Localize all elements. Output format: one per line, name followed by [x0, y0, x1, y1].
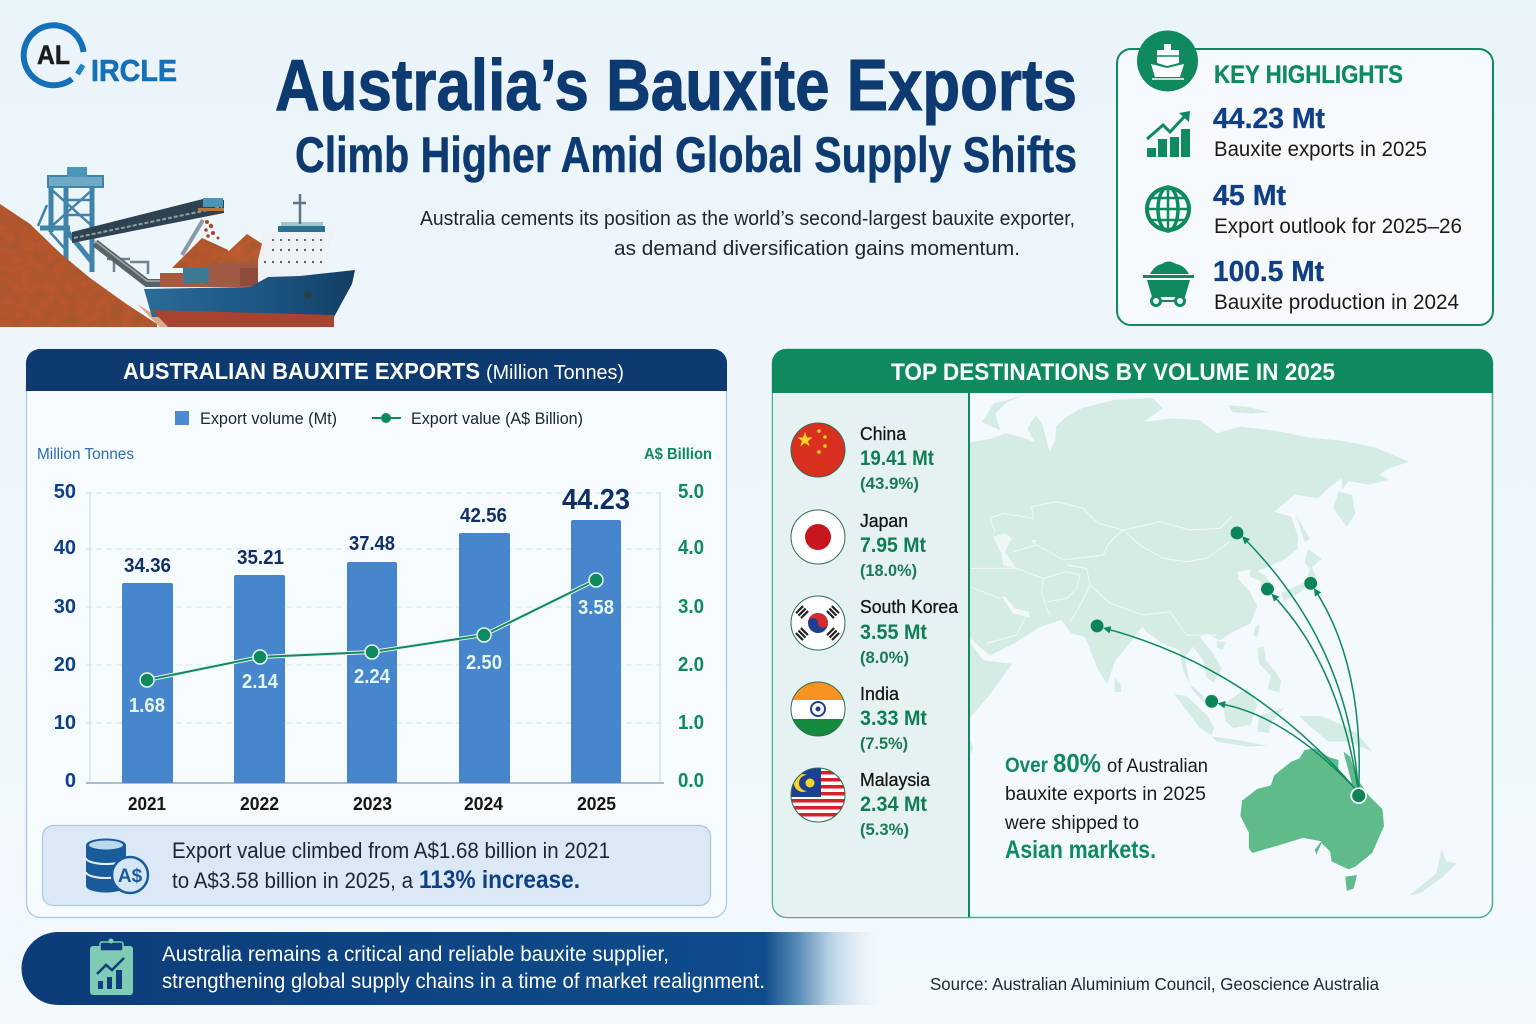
title: Australia’s Bauxite Exports [275, 46, 1077, 126]
destination: South Korea [860, 597, 959, 667]
destination: Japan [860, 511, 926, 580]
destination: South Korea: (8.0%) [860, 648, 909, 667]
destination: India [860, 684, 927, 753]
flag: China [791, 423, 845, 477]
left axis labels: 40 [54, 537, 76, 559]
legend [175, 409, 583, 428]
stat: outlook: 45 Mt [1213, 180, 1286, 212]
export value line: 3.58 [578, 597, 614, 619]
illustration: bauxite pile, conveyor and cargo ship [0, 167, 355, 327]
callout text: Export value climbed from A$1.68 billion in 2021 [172, 838, 610, 863]
world map [968, 395, 1457, 895]
lower conveyor [95, 243, 165, 283]
left axis labels: 30 [54, 596, 76, 618]
stat: exports 2025: 44.23 Mt [1213, 103, 1325, 135]
title [275, 46, 1077, 183]
stat: exports 2025: Bauxite exports in 2025 [1214, 138, 1427, 161]
export value line: 2.24 [354, 666, 391, 688]
subtitle text: Australia cements its position as the world’s second-largest bauxite exporter, [420, 208, 1075, 230]
right axis labels: 1.0 [678, 712, 704, 734]
panel: Australian bauxite exports chart [22, 349, 1493, 1005]
heading: KEY HIGHLIGHTS [1214, 61, 1403, 89]
subtitle text [420, 208, 1075, 260]
map: Australia [1240, 748, 1384, 891]
support strut [182, 220, 203, 255]
destination: Malaysia: Malaysia [860, 770, 931, 790]
Sulawesi [1257, 708, 1284, 733]
panel: key highlights [1117, 30, 1493, 325]
map markers [1091, 527, 1366, 803]
map callout text: were shipped to [1004, 812, 1139, 834]
flag: Malaysia [790, 768, 846, 822]
containers [160, 273, 210, 287]
destination: China: 19.41 Mt [860, 447, 934, 470]
logo: AL Circle [24, 25, 177, 88]
right axis labels: 3.0 [678, 596, 704, 618]
bottom banner [22, 932, 885, 1005]
left axis labels [54, 481, 76, 792]
export value line: 2.14 [242, 671, 279, 693]
icon: rising chart [1147, 111, 1190, 157]
destination: China [860, 424, 934, 493]
legend: Export volume (Mt) [200, 409, 337, 428]
year labels: 2023 [353, 793, 392, 814]
destination: Malaysia: 2.34 Mt [860, 793, 927, 816]
bars [122, 520, 621, 783]
map callout text: 80% [1053, 748, 1101, 778]
axis titles: Million Tonnes [37, 446, 134, 463]
panel header [772, 349, 1493, 393]
year labels [128, 793, 616, 814]
icon: coins with A$ [86, 838, 148, 893]
bar value labels: 37.48 [349, 533, 395, 555]
legend: Export value (A$ Billion) [411, 409, 583, 428]
destination: Malaysia: (5.3%) [860, 820, 909, 839]
callout text [172, 838, 610, 894]
icon: coins with A$: A$ [118, 866, 143, 887]
stat: production [1213, 256, 1459, 314]
icon: globe [1146, 187, 1190, 231]
title: Climb Higher Amid Global Supply Shifts [295, 127, 1077, 183]
left axis labels: 20 [54, 654, 76, 676]
Philippines [1257, 647, 1281, 693]
New Guinea [1300, 716, 1372, 752]
flag: South Korea [791, 596, 845, 650]
logo: AL Circle: AL [37, 40, 70, 70]
panel header: AUSTRALIAN BAUXITE EXPORTS [123, 358, 480, 384]
map callout text: of Australian [1107, 755, 1208, 777]
tower [38, 167, 103, 272]
destination: India: (7.5%) [860, 734, 908, 753]
map callout text: bauxite exports in 2025 [1005, 783, 1206, 805]
right axis labels [678, 481, 704, 792]
arrows: export routes [1105, 537, 1359, 789]
map: seas and borders [970, 502, 1232, 643]
right axis labels: 5.0 [678, 481, 704, 503]
icon: ship badge [1137, 30, 1198, 92]
column divider [968, 393, 970, 917]
bar value labels: 35.21 [237, 547, 284, 569]
year labels: 2022 [240, 793, 279, 814]
year labels: 2021 [128, 793, 166, 814]
left axis labels: 10 [54, 712, 76, 734]
map callout text: Over [1005, 754, 1048, 777]
export value line: 1.68 [129, 695, 165, 717]
Taiwan [1253, 625, 1260, 637]
year labels: 2024 [464, 793, 504, 814]
destination: India: 3.33 Mt [860, 707, 927, 730]
panel header: (Million Tonnes) [486, 362, 624, 384]
Java [1212, 736, 1267, 747]
destinations column background [773, 393, 969, 917]
callout text: 113% increase. [419, 866, 580, 894]
flag: Japan [791, 510, 845, 564]
export value line: 2.50 [466, 652, 502, 674]
callout text: to A$3.58 billion in 2025, a [172, 868, 414, 893]
stat: production: Bauxite production in 2024 [1214, 291, 1459, 314]
Borneo [1224, 687, 1257, 728]
map callout text: Asian markets. [1005, 836, 1156, 864]
banner text: Australia remains a critical and reliable bauxite supplier, [162, 942, 669, 966]
bar chart [54, 481, 704, 814]
panel: top destinations [772, 349, 1493, 918]
axis titles [37, 446, 712, 463]
destination: China: China [860, 424, 907, 444]
icon: clipboard with chart [90, 938, 133, 995]
panel header: TOP DESTINATIONS BY VOLUME IN 2025 [891, 359, 1335, 386]
flag: India [790, 682, 846, 737]
icon: mine cart [1143, 262, 1194, 306]
right axis labels: 4.0 [678, 537, 704, 559]
falling ore [204, 220, 220, 240]
Sakhalin [1333, 491, 1355, 527]
Japan [1296, 515, 1310, 542]
right axis labels: 0.0 [678, 770, 704, 792]
stat: production: 100.5 Mt [1213, 256, 1324, 288]
stat: exports 2025 [1213, 103, 1427, 161]
subtitle text: as demand diversification gains momentum. [614, 238, 1020, 260]
New Zealand [1409, 849, 1457, 895]
bauxite pile [0, 204, 157, 327]
rear frame [107, 259, 148, 274]
stat: outlook [1213, 180, 1462, 238]
logo: AL Circle: IRCLE [91, 53, 177, 88]
Hainan [1217, 642, 1225, 650]
stat: outlook: Export outlook for 2025–26 [1214, 215, 1462, 238]
bar value labels: 44.23 [562, 484, 630, 516]
year labels: 2025 [577, 793, 616, 814]
export value line [129, 573, 614, 717]
bar value labels: 42.56 [460, 505, 507, 527]
destination: South Korea: 3.55 Mt [860, 621, 927, 644]
superstructure [258, 232, 335, 277]
left axis labels: 0 [65, 770, 76, 792]
map: Asia landmass [968, 395, 1457, 895]
Sumatra [1174, 694, 1214, 735]
Sri Lanka [1115, 678, 1121, 693]
destination: India: India [860, 684, 900, 704]
banner text [162, 942, 765, 993]
hull [144, 270, 355, 317]
destination: China: (43.9%) [860, 474, 919, 493]
destination: Japan: (18.0%) [860, 561, 917, 580]
panel header [26, 349, 727, 391]
destination: Japan: Japan [860, 511, 908, 531]
bar value labels [124, 484, 630, 577]
ground [137, 304, 210, 327]
map callout text [1004, 748, 1208, 864]
banner text: strengthening global supply chains in a time of market realignment. [162, 969, 765, 993]
destination: Japan: 7.95 Mt [860, 534, 926, 557]
ore heaps on ship [172, 238, 232, 268]
main conveyor [72, 199, 224, 243]
destination: Malaysia [860, 770, 931, 839]
callout: export value increase [42, 826, 710, 906]
source: Source: Australian Aluminium Council, Geoscience Australia [930, 974, 1379, 994]
bar value labels: 34.36 [124, 555, 171, 577]
destination: South Korea: South Korea [860, 597, 959, 617]
left axis labels: 50 [54, 481, 76, 503]
right axis labels: 2.0 [678, 654, 704, 676]
axis titles: A$ Billion [644, 446, 712, 463]
